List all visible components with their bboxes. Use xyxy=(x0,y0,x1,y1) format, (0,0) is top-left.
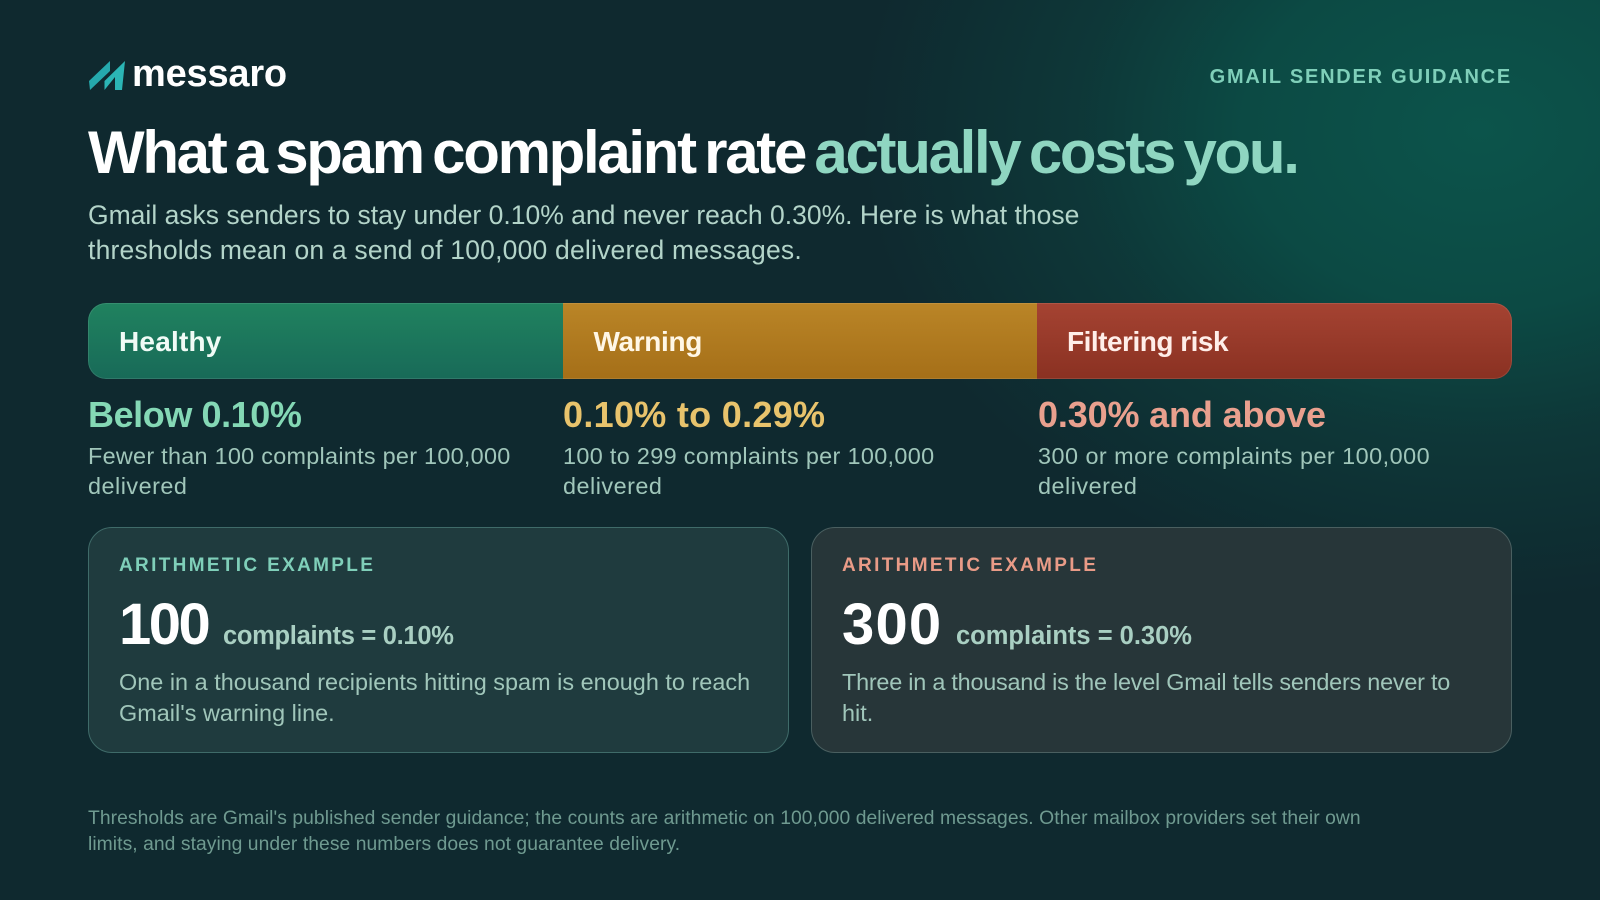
icon: logo chevrons xyxy=(89,61,125,90)
tier description: 100 to 299 complaints per 100,000 xyxy=(563,443,934,469)
tier description xyxy=(1038,443,1430,499)
card description xyxy=(842,669,1450,726)
tier description xyxy=(88,443,511,499)
segment: warning: Warning xyxy=(594,326,702,357)
panel: 300 complaints example xyxy=(811,527,1512,753)
tier range: 0.10% to 0.29% xyxy=(563,394,825,435)
wordmark: messaro xyxy=(132,53,287,95)
card label: ARITHMETIC EXAMPLE xyxy=(842,555,1098,576)
tier: filtering risk xyxy=(1038,394,1430,499)
footnote xyxy=(88,808,1361,855)
tier: warning xyxy=(563,394,934,499)
tier description: delivered xyxy=(88,473,187,499)
tier range: 0.30% and above xyxy=(1038,394,1326,435)
footnote: Thresholds are Gmail's published sender guidance; the counts are arithmetic on 100,000 delivered messages. Other mailbox providers set their own xyxy=(88,808,1361,829)
card description xyxy=(119,669,750,726)
title: What a spam complaint rate actually costs you. xyxy=(88,119,1298,186)
big number: 100 xyxy=(119,592,208,657)
equation: complaints = 0.30% xyxy=(956,622,1192,650)
eyebrow label: GMAIL SENDER GUIDANCE xyxy=(1210,66,1512,88)
big number: 300 xyxy=(842,592,942,657)
tier description: delivered xyxy=(1038,473,1137,499)
card description: Three in a thousand is the level Gmail tells senders never to xyxy=(842,669,1450,695)
tier description xyxy=(563,443,934,499)
tier range: Below 0.10% xyxy=(88,394,301,435)
card description: One in a thousand recipients hitting spam is enough to reach xyxy=(119,669,750,695)
segment: healthy xyxy=(88,303,563,379)
subtitle: thresholds mean on a send of 100,000 delivered messages. xyxy=(88,235,802,265)
panel: 100 complaints example xyxy=(88,527,789,753)
equation: complaints = 0.10% xyxy=(223,622,454,650)
logo xyxy=(89,53,287,95)
tier description: 300 or more complaints per 100,000 xyxy=(1038,443,1430,469)
subtitle xyxy=(88,200,1079,265)
segment: warning xyxy=(562,303,1038,379)
tier: healthy xyxy=(88,394,511,499)
tier description: delivered xyxy=(563,473,662,499)
threshold bar xyxy=(88,303,1512,379)
segment: filtering risk xyxy=(1037,303,1512,379)
footnote: limits, and staying under these numbers does not guarantee delivery. xyxy=(88,834,680,855)
segment: healthy: Healthy xyxy=(119,326,222,357)
card label: ARITHMETIC EXAMPLE xyxy=(119,555,375,576)
card description: hit. xyxy=(842,700,873,726)
subtitle: Gmail asks senders to stay under 0.10% and never reach 0.30%. Here is what those xyxy=(88,200,1079,230)
segment: filtering risk: Filtering risk xyxy=(1067,326,1228,357)
tier description: Fewer than 100 complaints per 100,000 xyxy=(88,443,511,469)
card description: Gmail's warning line. xyxy=(119,700,335,726)
